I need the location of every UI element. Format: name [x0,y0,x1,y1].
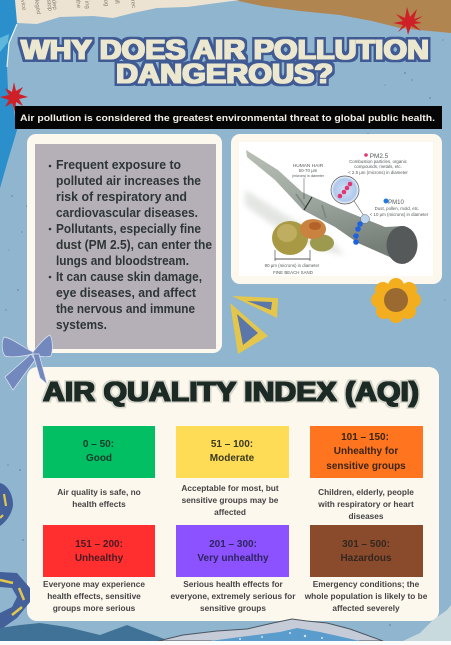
card: good: Good [86,453,112,464]
blue torn paper strip [0,0,18,188]
card: unhealthy for sensitive groups: Unhealthy for [334,446,398,457]
decoration: glitter mound bottom [158,619,383,641]
card: very unhealthy: everyone, extremely serious for [171,591,296,601]
panel: air quality index [27,367,439,621]
title: WHY DOES AIR POLLUTION [21,34,429,65]
bullet list: eye diseases, and affect [56,286,197,300]
icon: red star top right [393,7,423,35]
illustration: size labels: Combustion particles, organic [349,159,408,164]
illustration: size labels: compounds, metals, etc. [354,164,402,169]
card: unhealthy: groups more serious [53,603,136,613]
icon: ribbon bow [2,335,52,390]
card: very unhealthy: Very unhealthy [197,553,269,564]
card: moderate: Acceptable for most, but [181,483,279,493]
decoration: mountains bottom left [0,623,167,641]
card: unhealthy: 151 – 200: [75,539,123,550]
illustration: size labels: PM2.5 [370,153,389,160]
illustration: size labels: HUMAN HAIR [293,163,324,169]
card: very unhealthy: 201 – 300: [209,539,257,550]
icon: red star left [0,82,28,112]
bullet list: polluted air increases the [56,174,201,188]
illustration: size labels [265,153,429,275]
illustration: size labels: FINE BEACH SAND [273,270,313,275]
icon: yellow triangle upper [232,296,278,318]
card: unhealthy for sensitive groups: sensitive groups [326,461,406,472]
icon: sunflower [371,278,421,323]
card: unhealthy: Everyone may experience [43,579,145,589]
illustration: human hair [246,150,418,264]
card: unhealthy for sensitive groups: Children, elderly, people [318,487,414,497]
card: good: health effects [72,499,126,509]
icon: yellow triangle lower [230,303,268,354]
card: very unhealthy [171,525,296,613]
illustration: size labels: < 2.5 μm (microns) in diameter [348,170,408,175]
torn newspaper top [15,0,240,24]
panel: health effects [27,134,222,353]
decoration: blue road with yellow dashes lower [0,572,30,630]
title [21,34,429,89]
card: moderate: affected [214,507,246,517]
illustration: size labels: Dust, pollen, mold, etc. [375,206,419,211]
bullet list: Frequent exposure to [56,158,181,172]
card: very unhealthy: Serious health effects for [183,579,284,589]
illustration: sand grains [272,219,334,255]
bullet list [49,158,212,332]
title: DANGEROUS? [116,58,333,89]
bullet list: It can cause skin damage, [56,270,202,284]
hair shadow [245,190,345,255]
card: hazardous: Emergency conditions; the [313,579,420,589]
illustration: size labels: < 10 μm (microns) in diameter [370,212,429,217]
panel: particle size illustration [231,134,442,284]
card: unhealthy for sensitive groups: with respiratory or heart [317,499,414,509]
card: moderate: Moderate [210,453,255,464]
card: unhealthy for sensitive groups [310,426,423,521]
card: unhealthy: Unhealthy [75,553,124,564]
bullet list: risk of respiratory and [56,190,187,204]
decoration: blue road with yellow dashes upper [0,483,13,526]
bullet list: Pollutants, especially fine [56,222,201,236]
illustration: size labels: (microns) in diameter [292,174,325,178]
card: good [43,426,155,509]
subtitle bar [15,106,442,129]
card: hazardous: whole population is likely to be [304,591,428,601]
card: unhealthy [43,525,155,613]
bullet list: systems. [56,318,107,332]
subtitle bar: Air pollution is considered the greatest environmental threat to global public health. [20,113,435,123]
card: good: Air quality is safe, no [57,487,141,497]
bullet list: dust (PM 2.5), can enter the [56,238,212,252]
illustration: size labels: PM10 [388,200,404,206]
card: moderate: 51 – 100: [211,439,253,450]
bullet list: the nervous and immune [56,302,195,316]
decoration: silver glitter bottom right [403,605,451,641]
card: good: 0 – 50: [83,439,114,450]
card: moderate [176,426,289,517]
bottom white edge [0,641,451,645]
illustration: PM particles [331,153,388,245]
card: unhealthy for sensitive groups: 101 – 150: [341,432,389,443]
illustration: size labels: 90 μm (microns) in diameter [265,263,320,268]
heading: AQI: AIR QUALITY INDEX (AQI) [43,376,419,407]
card: unhealthy: health effects, sensitive [47,591,141,601]
card: hazardous [304,525,428,613]
card: moderate: sensitive groups may be [182,495,279,505]
card: hazardous: 301 – 500: [342,539,390,550]
card: hazardous: affected severely [332,603,400,613]
torn newspaper top: ing [83,0,90,9]
card: hazardous: Hazardous [340,553,392,564]
card: very unhealthy: sensitive groups [200,603,266,613]
bullet list: cardiovascular diseases. [56,206,198,220]
card: unhealthy for sensitive groups: diseases [348,511,384,521]
illustration: size labels: 50-70 μm [299,168,318,173]
bullet list: lungs and bloodstream. [56,254,189,268]
torn brown paper top [234,0,451,33]
